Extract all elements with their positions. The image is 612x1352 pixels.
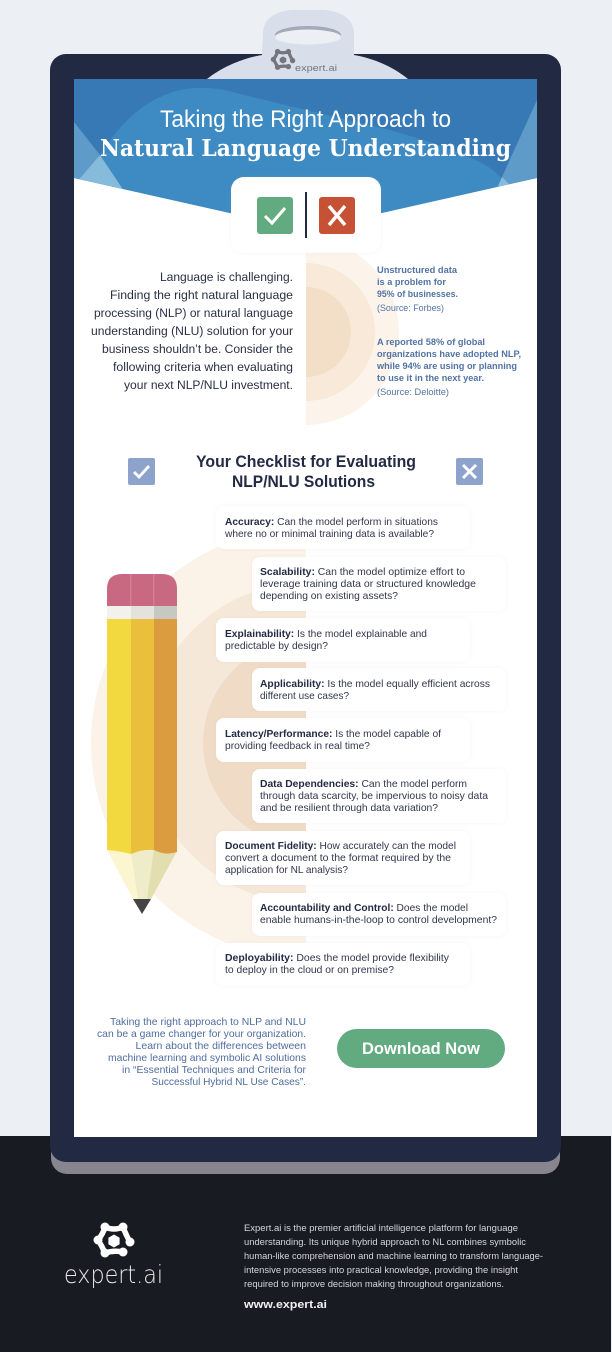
call to action text: machine learning and symbolic AI solutions (108, 1052, 306, 1064)
card: data dependencies: through data scarcity, be impervious to noisy data (260, 791, 488, 802)
stat: NLP adoption: to use it in the next year. (377, 373, 484, 383)
stat: unstructured data: (Source: Forbes) (377, 303, 444, 313)
card: accuracy (216, 506, 470, 549)
intro text (91, 270, 293, 392)
header banner (74, 79, 537, 214)
card: document fidelity: application for NL analysis? (225, 865, 348, 876)
card: document fidelity: Document Fidelity: How accurately can the model (225, 841, 456, 852)
intro text: processing (NLP) or natural language (94, 306, 293, 320)
checklist heading: NLP/NLU Solutions (232, 472, 375, 491)
stat: NLP adoption: organizations have adopted NLP, (377, 349, 521, 359)
checklist half rings (91, 528, 306, 958)
pencil wood tip (107, 849, 177, 899)
stat: unstructured data (377, 265, 458, 313)
icon: small expert.ai logo (271, 49, 295, 70)
footer background (0, 1136, 611, 1352)
card: deployability: to deploy in the cloud or on premise? (225, 965, 394, 976)
clipboard clip with logo (207, 10, 408, 79)
stat: NLP adoption (376, 337, 521, 397)
card: scalability (252, 557, 506, 611)
icon: green check (257, 197, 293, 234)
card: data dependencies: and be resilient through data variation? (260, 803, 438, 814)
card: applicability: different use cases? (260, 691, 349, 702)
card: document fidelity: convert a document to the format required by the (225, 853, 451, 864)
download button: Download Now (362, 1039, 481, 1058)
footer description: intensive processes into practical knowledge, providing the insight (244, 1265, 518, 1275)
footer description: understanding. Its unique hybrid approach to NL combines symbolic (244, 1237, 526, 1247)
icon: blue cross (456, 458, 483, 485)
intro text: understanding (NLU) solution for your (91, 324, 293, 338)
top half rings (306, 239, 399, 425)
card: applicability: Applicability: Is the model equally efficient across (260, 679, 490, 690)
card: scalability: depending on existing assets? (260, 591, 398, 602)
call to action text: in “Essential Techniques and Criteria for (122, 1064, 306, 1076)
card: explainability (216, 618, 470, 662)
card: document fidelity (216, 831, 470, 885)
stat: unstructured data: Unstructured data (377, 265, 458, 275)
footer description: Expert.ai is the premier artificial intelligence platform for language (244, 1223, 518, 1233)
footer description (244, 1223, 543, 1289)
call to action text: can be a game changer for your organization. (97, 1028, 306, 1040)
footer logo (64, 1222, 163, 1289)
icon: blue check (128, 458, 155, 485)
title (100, 106, 511, 162)
card: applicability (252, 668, 506, 711)
stat: unstructured data: 95% of businesses. (377, 289, 458, 299)
pencil ferrule (107, 606, 177, 619)
card: accountability: enable humans-in-the-loop to control development? (260, 915, 497, 926)
title: Natural Language Understanding (100, 134, 511, 162)
checklist heading: Your Checklist for Evaluating (196, 452, 416, 471)
pencil eraser (107, 574, 177, 606)
intro text: Language is challenging. (160, 270, 293, 284)
check and cross card (231, 177, 381, 253)
icon: red cross (319, 197, 355, 234)
card: latency: Latency/Performance: Is the model capable of (225, 729, 441, 740)
footer wordmark: expert.ai (64, 1260, 163, 1289)
card: accountability (252, 893, 506, 936)
stat: NLP adoption: while 94% are using or planning (376, 361, 517, 371)
title: Taking the Right Approach to (160, 106, 451, 133)
pencil lead (133, 899, 151, 914)
card: data dependencies (252, 769, 506, 823)
stat: NLP adoption: A reported 58% of global (377, 337, 485, 347)
card: data dependencies: Data Dependencies: Can the model perform (260, 779, 467, 790)
intro text: your next NLP/NLU investment. (124, 378, 293, 392)
card: latency: providing feedback in real time? (225, 741, 370, 752)
download button (337, 1029, 505, 1068)
card: latency (216, 718, 470, 762)
stat: NLP adoption: (Source: Deloitte) (377, 387, 449, 397)
small logo wordmark: expert.ai (295, 63, 337, 74)
footer description: human-like comprehension and machine learning to transform language- (244, 1251, 543, 1261)
intro text: following criteria when evaluating (113, 360, 293, 374)
card: accuracy: where no or minimal training data is available? (224, 529, 434, 540)
card: deployability (216, 943, 470, 986)
call to action text: Successful Hybrid NL Use Cases”. (152, 1076, 306, 1088)
checklist heading (196, 452, 416, 491)
card: deployability: Deployability: Does the model provide flexibility (225, 953, 450, 964)
card: scalability: Scalability: Can the model optimize effort to (260, 567, 465, 578)
stat: unstructured data: is a problem for (377, 277, 447, 287)
divider (305, 192, 307, 238)
call to action text: Learn about the differences between (136, 1040, 306, 1052)
pencil body (107, 619, 177, 854)
card: explainability: predictable by design? (225, 641, 328, 652)
card: explainability: Explainability: Is the model explainable and (225, 629, 427, 640)
clipboard board (50, 54, 561, 1174)
call to action text: Taking the right approach to NLP and NLU (110, 1016, 306, 1028)
card: accountability: Accountability and Control: Does the model (260, 903, 468, 914)
white paper (74, 79, 537, 1137)
icon: expert.ai logo (94, 1222, 134, 1258)
card: scalability: leverage training data or structured knowledge (260, 579, 476, 590)
intro text: Finding the right natural language (110, 288, 293, 302)
intro text: business shouldn’t be. Consider the (102, 342, 293, 356)
footer description: required to improve decision making throughout organizations. (244, 1279, 504, 1289)
footer website: www.expert.ai (243, 1299, 327, 1311)
card: accuracy: Accuracy: Can the model perform in situations (225, 517, 438, 528)
pencil illustration (107, 574, 177, 914)
call to action text (97, 1016, 306, 1088)
